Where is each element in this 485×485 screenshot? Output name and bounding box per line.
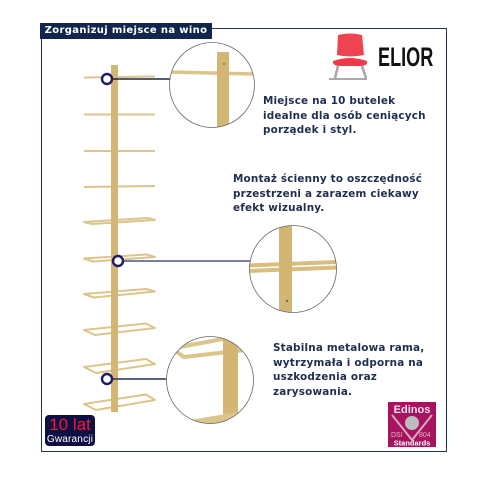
text block: wall mount: Montaż ścienny to oszczędność (233, 173, 422, 185)
detail circle top (170, 42, 254, 132)
text block: wall mount: przestrzeni a zarazem ciekawy (233, 188, 419, 200)
title: Zorganizuj miejsce na wino (45, 25, 207, 36)
frame shelves (84, 218, 155, 410)
text block: capacity: idealne dla osób ceniących (263, 110, 426, 122)
frame (41, 28, 447, 452)
text block: frame: Stabilna metalowa rama, (273, 342, 424, 354)
badge: warranty (45, 415, 95, 446)
text block: capacity: Miejsce na 10 butelek (263, 95, 395, 107)
wine rack illustration (83, 34, 368, 424)
badge: Edinos standards: Edinos (394, 404, 430, 416)
logo text: ELIOR (378, 42, 433, 72)
text block: wall mount (233, 173, 422, 214)
text block: capacity (263, 95, 426, 136)
marker bottom (102, 374, 112, 384)
pole (111, 65, 118, 412)
title (40, 23, 212, 39)
text block: frame: zarysowania. (273, 386, 352, 398)
text block: frame (273, 342, 424, 398)
icon: red chair (329, 34, 367, 79)
badge: warranty: Gwarancji (47, 434, 93, 445)
marker top (102, 74, 112, 84)
connector lines (107, 79, 250, 379)
badge: Edinos standards: 804 (419, 432, 431, 439)
text block: frame: uszkodzenia oraz (273, 371, 377, 383)
text block: capacity: porządek i styl. (263, 124, 357, 136)
badge: warranty: 10 lat (49, 415, 91, 434)
text block: frame: wytrzymała i odporna na (273, 356, 423, 368)
detail circle bottom (166, 336, 254, 424)
badge: Edinos standards: DSI (391, 432, 403, 439)
text block: wall mount: efekt wizualny. (233, 202, 324, 214)
flat shelves (84, 76, 155, 187)
badge: Edinos standards (388, 402, 436, 447)
marker middle (113, 256, 123, 266)
detail circle middle (249, 225, 337, 313)
